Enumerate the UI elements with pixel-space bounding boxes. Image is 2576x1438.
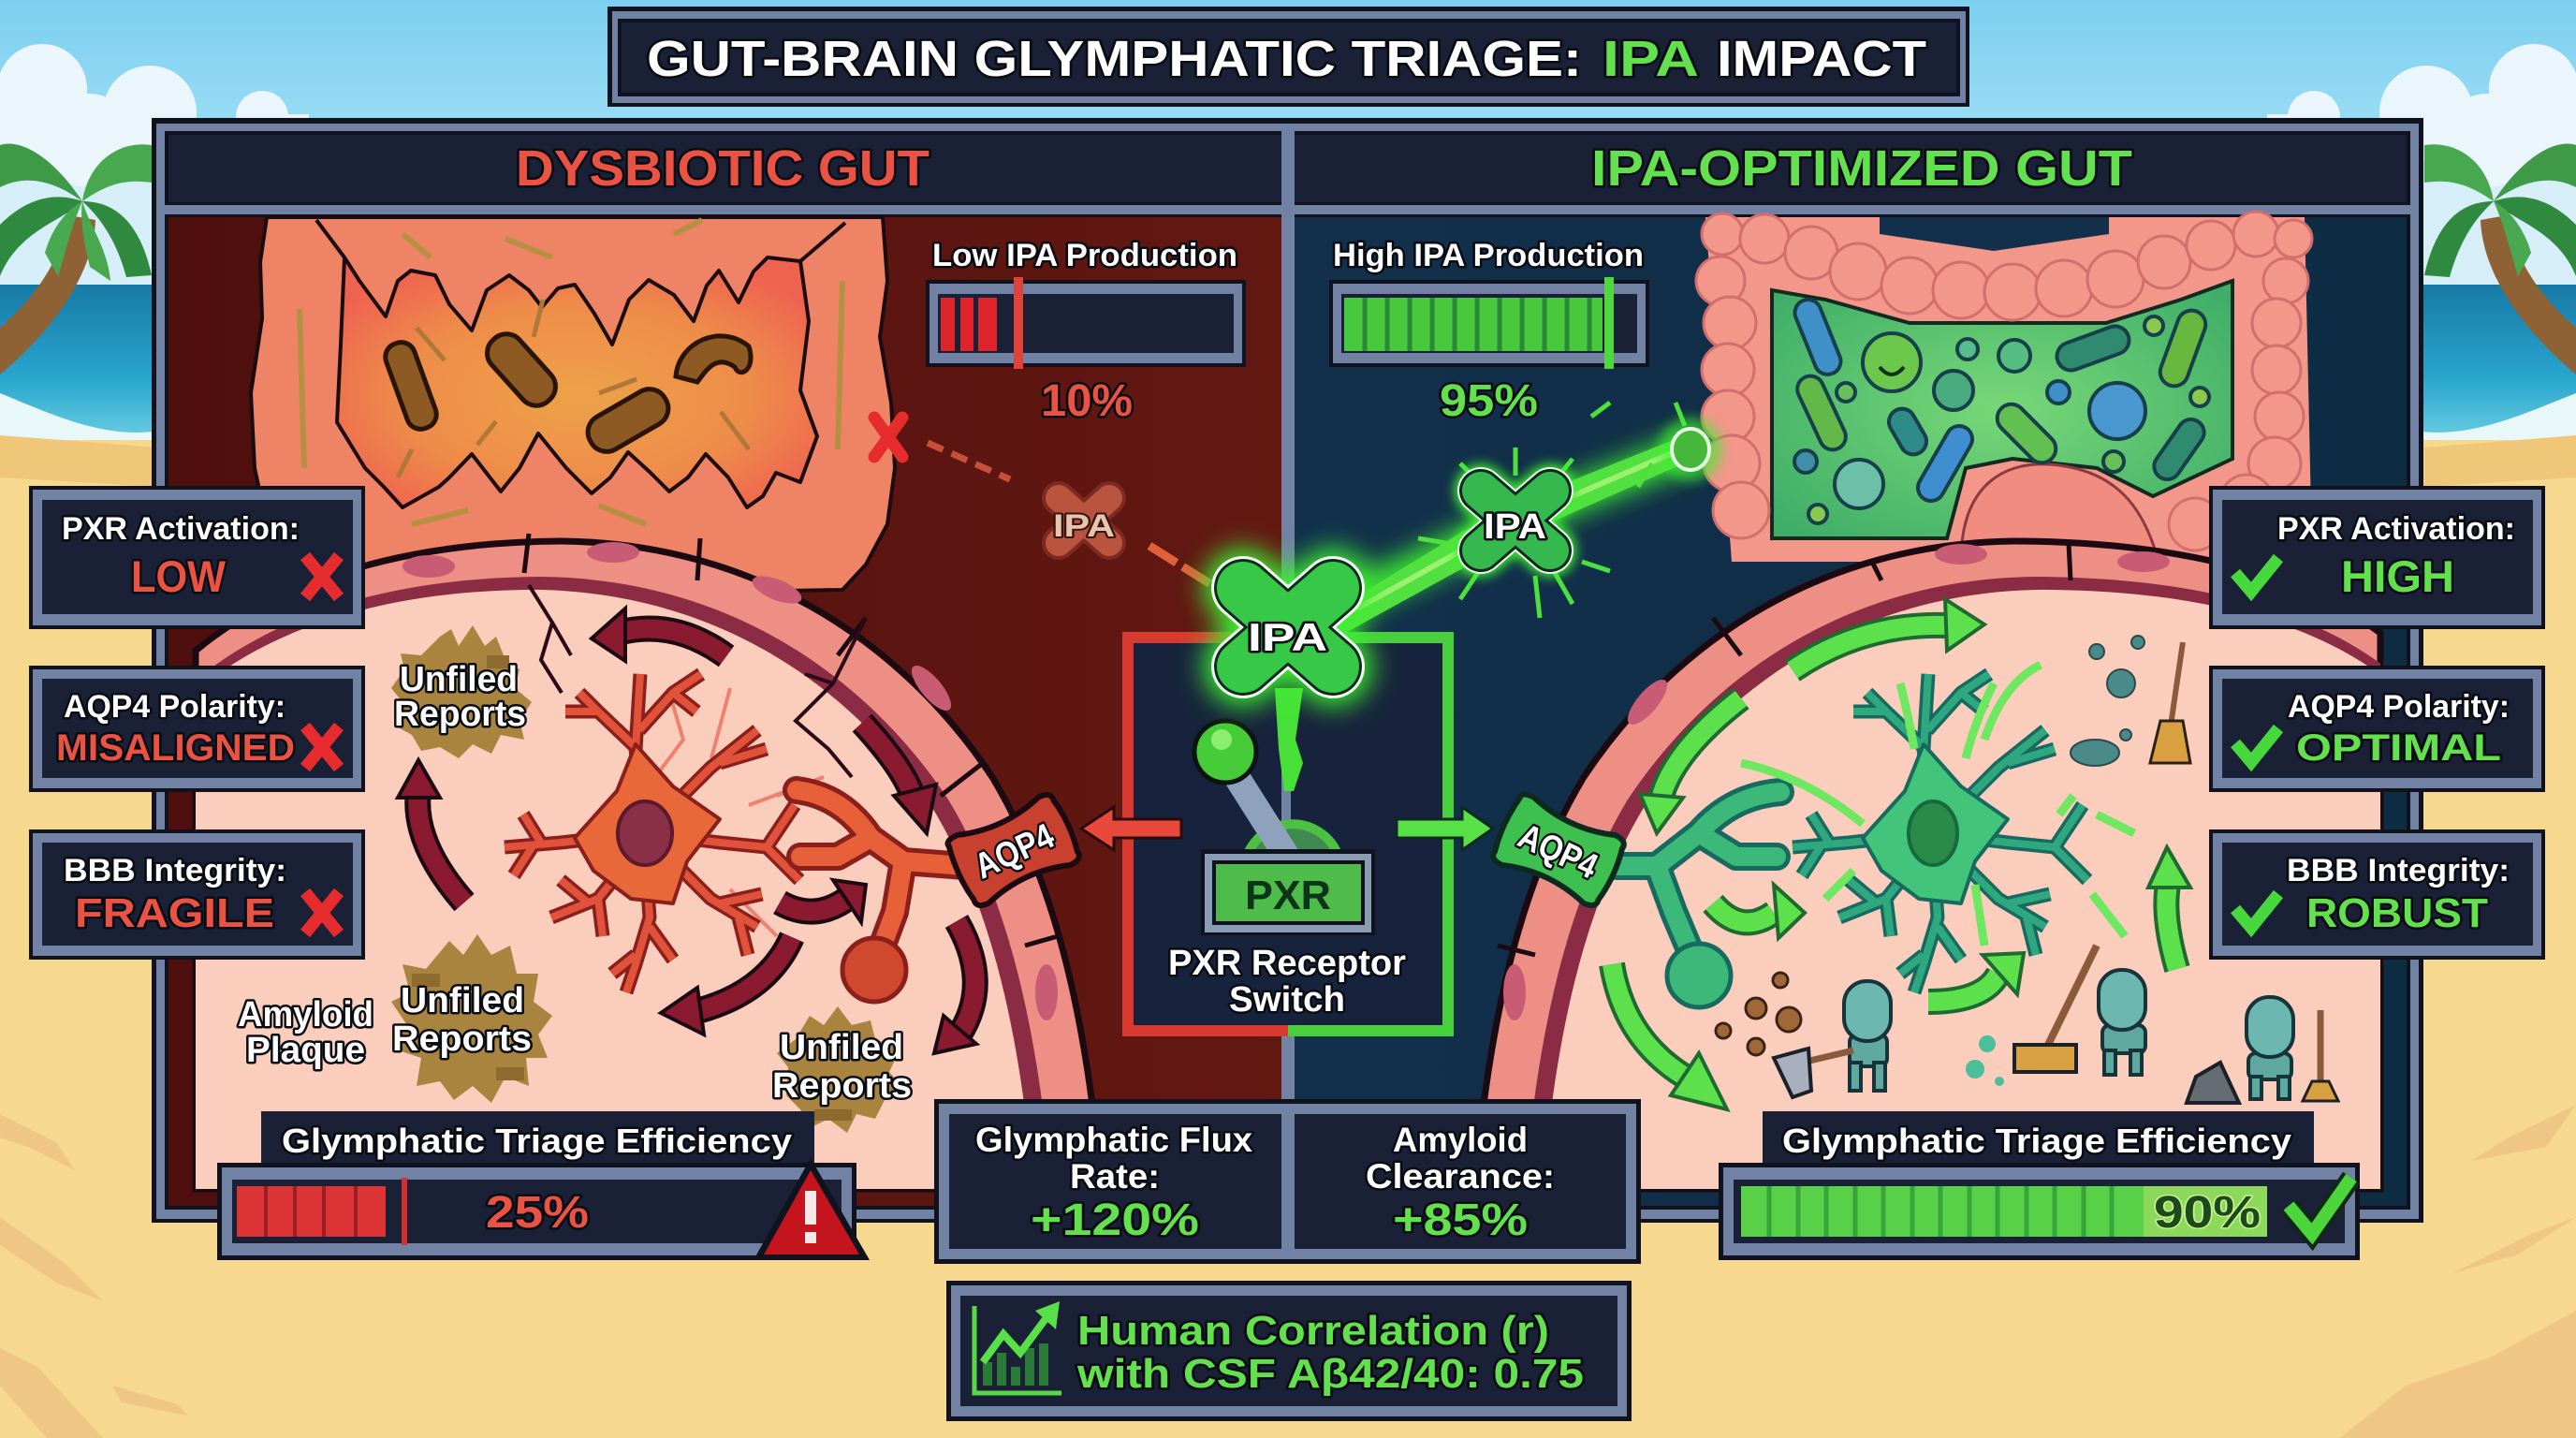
panel headers bar <box>165 124 2410 1219</box>
efficiency gauge: dysbiotic: 25% <box>486 1188 589 1238</box>
stat card: BBB integrity robust: ROBUST <box>2306 890 2488 936</box>
heading: IPA-optimized gut: IPA-OPTIMIZED GUT <box>1591 140 2132 197</box>
label: unfiled reports middle: Reports <box>392 1020 532 1059</box>
stat card: PXR activation low: PXR Activation: <box>62 511 300 547</box>
label: amyloid plaque: Amyloid <box>238 995 373 1034</box>
IPA production: high: High IPA Production <box>1333 238 1644 273</box>
panel: dysbiotic background <box>168 217 1288 1206</box>
stat card: AQP4 polarity optimal: OPTIMAL <box>2296 727 2501 769</box>
molecule: faded IPA: IPA <box>1053 508 1115 544</box>
molecule: small green IPA: IPA <box>1484 507 1546 547</box>
panel: PXR receptor switch: PXR <box>1245 873 1331 918</box>
IPA production: high: 95% <box>1440 376 1538 426</box>
stat card: BBB integrity fragile <box>29 829 365 960</box>
metric: clearance <box>1366 1121 1555 1245</box>
stat card: AQP4 polarity misaligned: AQP4 Polarity: <box>64 689 285 725</box>
intestinal wall lobes <box>1696 212 2312 550</box>
stat card: AQP4 polarity optimal: AQP4 Polarity: <box>2288 689 2510 725</box>
illustration: healthy gut <box>1696 212 2312 562</box>
IPA production: low <box>926 238 1246 426</box>
arrow: blocked IPA trail <box>928 443 1212 585</box>
amyloid clumps <box>391 625 906 1133</box>
wall bricks <box>402 542 1058 1020</box>
molecule: central IPA <box>1243 588 1333 667</box>
efficiency gauge: optimized <box>1719 1111 2360 1260</box>
workers and debris: cleanup crew <box>1716 636 2338 1103</box>
label: unfiled reports middle <box>392 981 532 1059</box>
microbes <box>1791 296 2209 523</box>
molecule: small green IPA <box>1481 491 1550 550</box>
worker one <box>1844 981 1891 1091</box>
human correlation panel: with CSF Aβ42/40: 0.75 <box>1076 1351 1584 1397</box>
title banner: IPA <box>1603 31 1699 87</box>
foot process <box>797 790 964 967</box>
lever <box>1244 824 1339 871</box>
efficiency gauge: dysbiotic <box>217 1111 870 1260</box>
stat card: AQP4 polarity optimal <box>2209 666 2545 792</box>
icon: efficiency check highlight <box>2289 1178 2351 1234</box>
astrocyte: dysbiotic <box>505 674 964 1002</box>
illustration: dysbiotic gut <box>251 217 895 599</box>
main comparison panel frame <box>152 118 2423 1223</box>
stat card: AQP4 polarity misaligned <box>29 666 365 792</box>
clouds left <box>0 44 309 285</box>
label: amyloid plaque <box>238 995 373 1070</box>
label: unfiled reports top <box>394 660 526 734</box>
clouds right <box>2267 44 2576 285</box>
AQP4 channel: green: AQP4 <box>1512 816 1603 887</box>
panel: PXR receptor switch: Switch <box>1229 980 1345 1020</box>
healthy wall bricks <box>1503 544 2170 1020</box>
small flow streaks <box>1741 665 2134 946</box>
stat card: PXR activation high: PXR Activation: <box>2277 511 2515 547</box>
label: unfiled reports middle: Unfiled <box>401 981 524 1020</box>
molecule: central IPA: IPA <box>1248 615 1327 659</box>
worker two <box>2099 970 2145 1075</box>
label: unfiled reports bottom: Reports <box>772 1066 912 1106</box>
flow arrows: healthy green <box>1612 599 2190 1109</box>
efficiency gauge: dysbiotic: Glymphatic Triage Efficiency <box>282 1122 792 1160</box>
cracks <box>529 585 866 777</box>
stat card: BBB integrity robust <box>2209 829 2545 960</box>
sand streaks <box>0 1105 2576 1438</box>
title banner: IMPACT <box>1717 31 1926 87</box>
label: unfiled reports top: Reports <box>394 695 526 734</box>
top right broom and debris <box>2171 642 2183 726</box>
stat card: BBB integrity robust: BBB Integrity: <box>2287 853 2510 888</box>
PXR button <box>1201 849 1375 935</box>
astrocyte: healthy <box>1617 665 2134 1007</box>
molecule: faded IPA <box>1053 498 1115 544</box>
icon: trend chart <box>974 1301 1061 1393</box>
efficiency gauge: optimized: Glymphatic Triage Efficiency <box>1782 1122 2291 1160</box>
label: amyloid plaque: Plaque <box>246 1031 365 1070</box>
label: unfiled reports top: Unfiled <box>400 660 518 699</box>
human correlation panel <box>946 1281 1632 1421</box>
stat card: BBB integrity fragile: FRAGILE <box>75 890 274 936</box>
illustration: healthy brain with vessel wall <box>1484 541 2380 1189</box>
title banner <box>607 7 1969 107</box>
stat card: BBB integrity fragile: BBB Integrity: <box>64 853 286 888</box>
healthy foot process <box>1617 792 1780 972</box>
efficiency gauge: optimized: 90% <box>2154 1188 2261 1238</box>
metric: flux: Rate: <box>1070 1157 1160 1196</box>
stat card: PXR activation high: HIGH <box>2341 551 2454 601</box>
icon: right palm tree <box>2424 143 2576 374</box>
bacteria: dysbiotic <box>382 327 751 458</box>
AQP4 channel: green <box>1488 791 1629 909</box>
panel: optimized background <box>1288 217 2407 1206</box>
heading: dysbiotic gut: DYSBIOTIC GUT <box>516 140 929 197</box>
flow arrows: stalled red <box>398 609 976 1053</box>
arrow: right output <box>1397 807 1493 850</box>
AQP4 channel: red <box>944 791 1084 909</box>
metric: clearance: +85% <box>1393 1196 1528 1245</box>
metric: flux: +120% <box>1031 1196 1199 1245</box>
stat card: PXR activation high <box>2209 486 2545 629</box>
icon: blocked X <box>874 418 902 457</box>
IPA production: low: 10% <box>1041 376 1133 426</box>
metric: clearance: Clearance: <box>1366 1157 1555 1196</box>
metric: flux: Glymphatic Flux <box>975 1121 1252 1159</box>
worker three <box>2247 997 2293 1099</box>
receptor label: PXR Receptor <box>1168 944 1406 983</box>
label: unfiled reports bottom <box>772 1028 912 1106</box>
metric: clearance: Amyloid <box>1393 1121 1528 1159</box>
IPA production: low: Low IPA Production <box>932 238 1237 273</box>
center metrics panel <box>934 1099 1641 1264</box>
IPA production: high <box>1329 238 1649 426</box>
illustration: dysbiotic brain with vessel wall <box>196 534 1092 1189</box>
panel: PXR receptor switch <box>1128 638 1448 1031</box>
icon: warning <box>754 1158 870 1260</box>
beam: IPA signal <box>1310 403 1722 637</box>
title banner: GUT-BRAIN GLYMPHATIC TRIAGE: <box>647 31 1582 87</box>
metric: flux <box>975 1121 1252 1245</box>
label: unfiled reports bottom: Unfiled <box>780 1028 903 1067</box>
arrow: left output <box>1081 807 1181 850</box>
icon: left palm tree <box>0 143 152 374</box>
AQP4 channel: red: AQP4 <box>969 816 1061 887</box>
stat card: PXR activation low <box>29 486 365 629</box>
stat card: PXR activation low: LOW <box>131 551 227 601</box>
human correlation panel: Human Correlation (r) <box>1077 1308 1549 1354</box>
stat card: AQP4 polarity misaligned: MISALIGNED <box>56 727 295 769</box>
debris near first worker <box>1716 973 1801 1055</box>
icon: check <box>2289 1178 2351 1234</box>
